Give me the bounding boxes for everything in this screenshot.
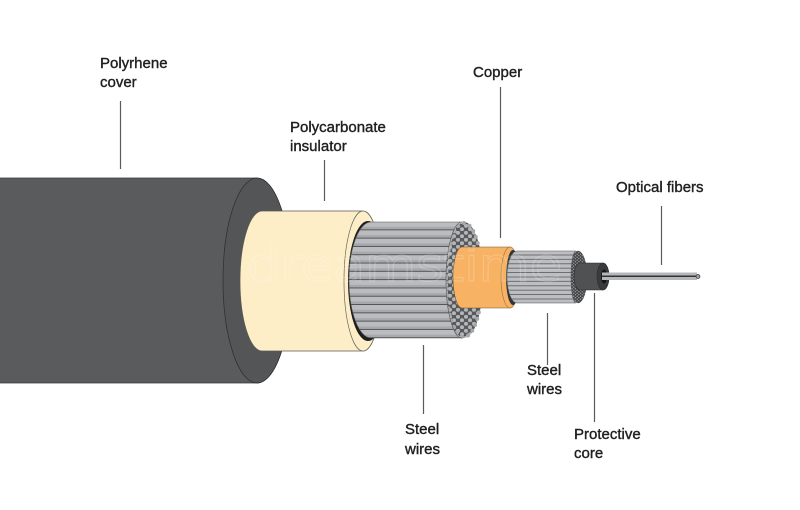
label: polycarbonate insulator: Polycarbonate [290, 119, 386, 136]
leader line: polyrhene cover [120, 101, 122, 169]
leader line: large steel wires [422, 345, 424, 414]
leader line: protective core [594, 293, 596, 422]
label: large steel wires: wires [404, 441, 440, 458]
leader line: small steel wires [546, 313, 548, 365]
label: small steel wires: wires [526, 381, 562, 398]
large steel wires [349, 222, 483, 338]
small steel wires [507, 251, 587, 303]
leader line: insulator [324, 160, 326, 201]
label: polyrhene cover: Polyrhene [100, 55, 168, 72]
label: large steel wires: Steel [405, 421, 439, 438]
label: protective core: Protective [574, 426, 641, 443]
label: protective core: core [574, 445, 603, 462]
leader line: copper [500, 87, 502, 238]
optical fibers [602, 272, 700, 280]
label: optical fibers: Optical fibers [616, 179, 704, 196]
label: small steel wires: Steel [527, 362, 561, 379]
copper layer [453, 247, 520, 308]
outer cable: polyrhene cover [0, 178, 291, 383]
watermark: dreamstime [247, 238, 562, 292]
protective core [574, 263, 609, 290]
leader line: optical fibers [660, 206, 662, 265]
label: copper: Copper [473, 64, 522, 81]
label: polycarbonate insulator: insulator [290, 138, 347, 155]
polycarbonate insulator [240, 211, 388, 351]
label: polyrhene cover: cover [100, 74, 137, 91]
